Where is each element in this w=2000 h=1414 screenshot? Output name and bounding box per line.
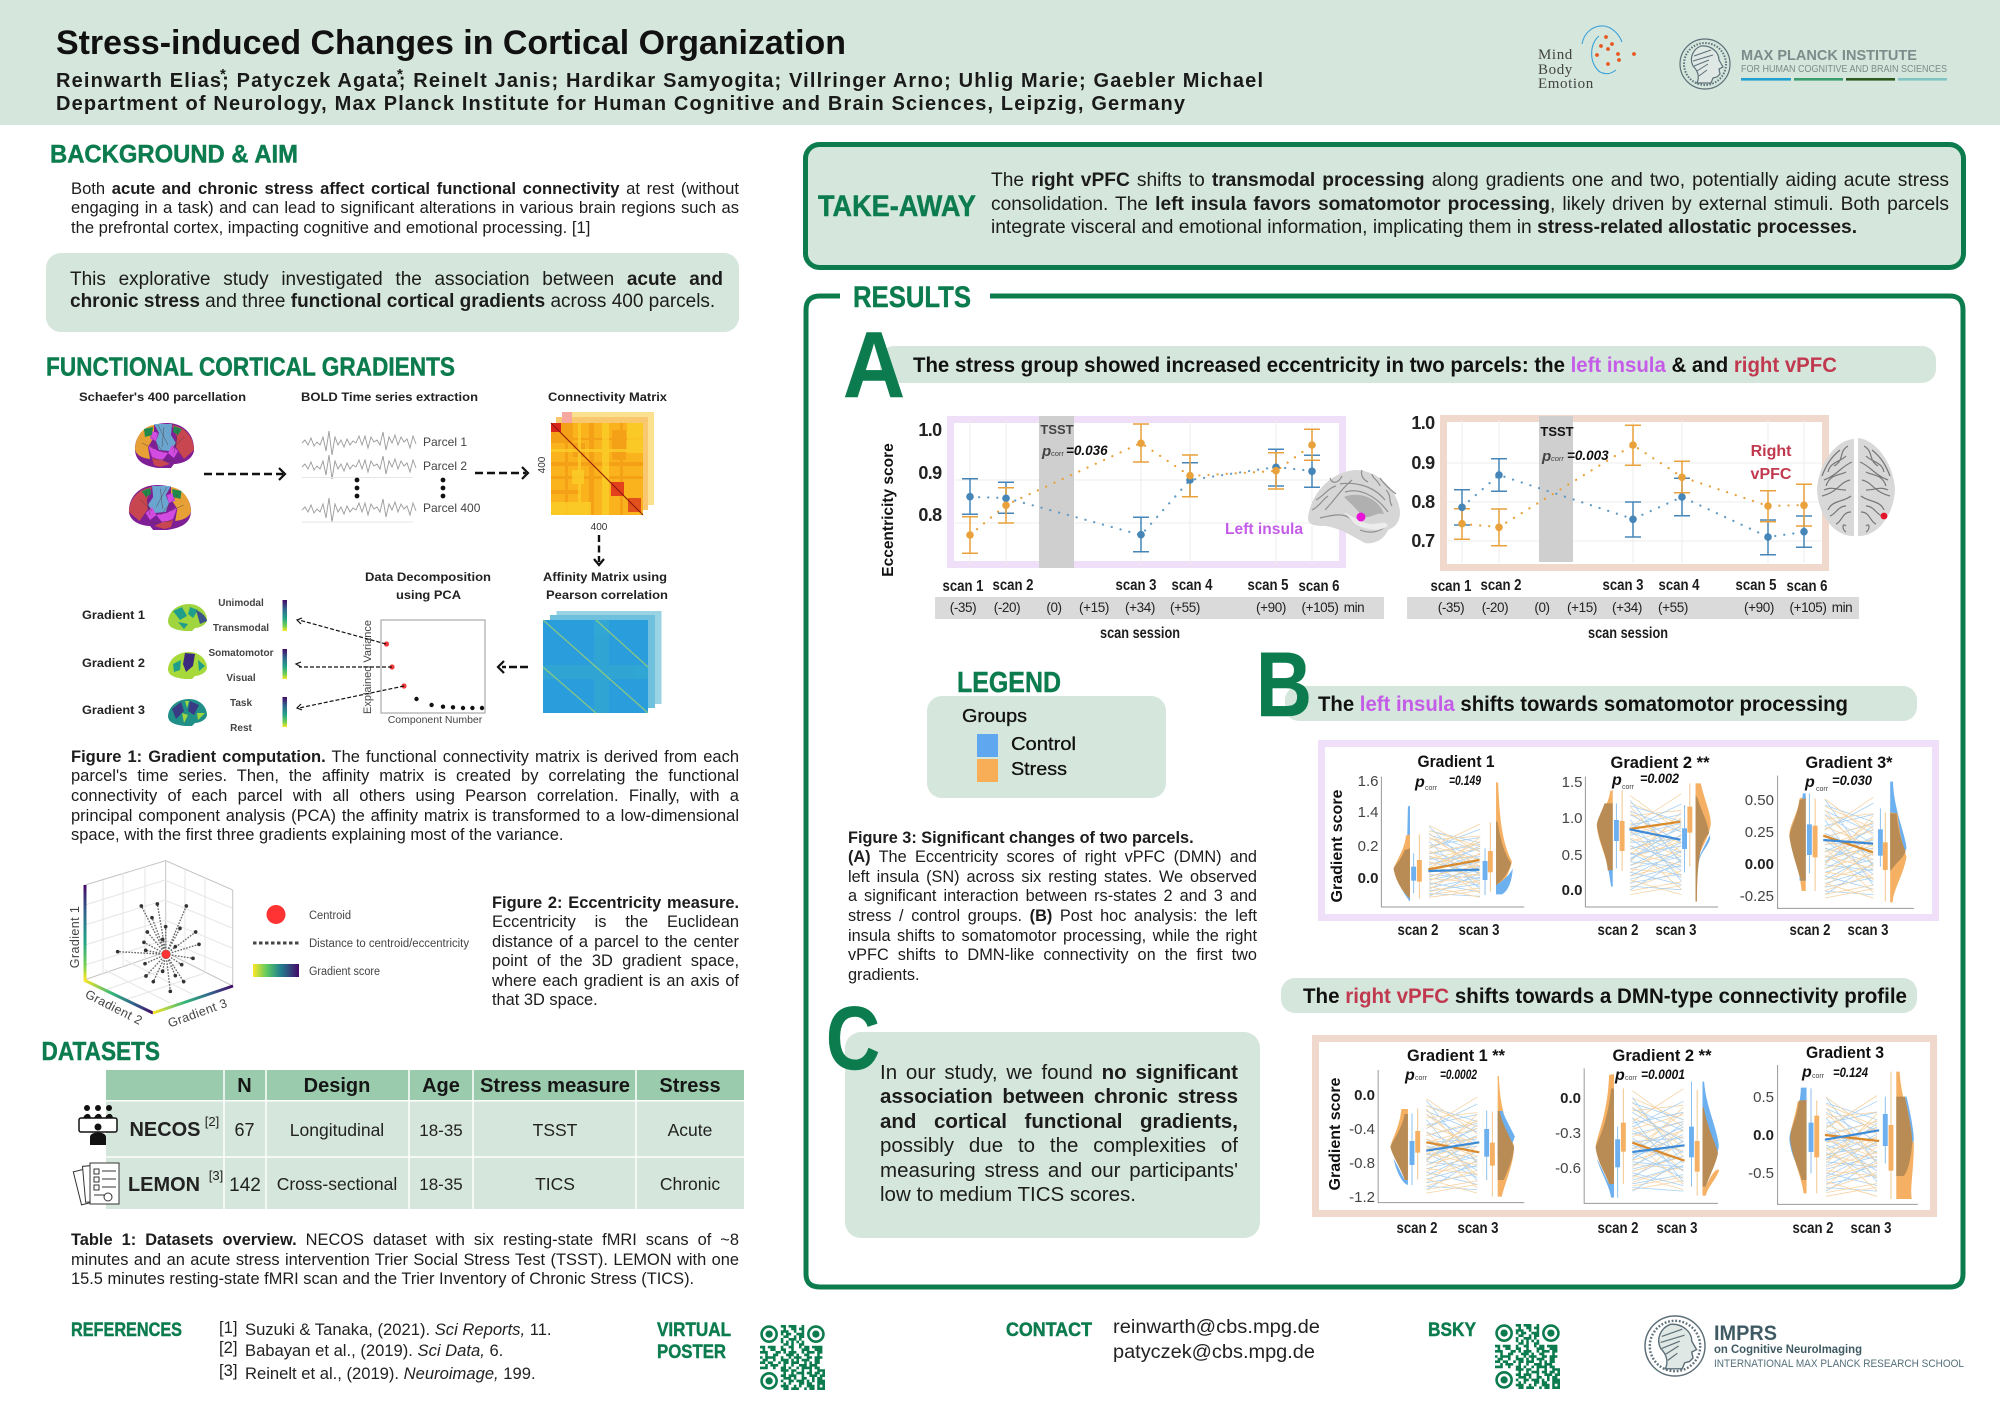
panel: left insula gradient rainclouds — [1322, 744, 1936, 939]
chart A: left insula eccentricity: 1.0 — [918, 420, 942, 440]
figure 2 legend: Centroid — [309, 910, 351, 922]
raincloud: gradient 3: scan 2 — [1792, 1220, 1834, 1237]
panel: take-away — [806, 144, 1964, 268]
label: left insula: Left insula — [1225, 521, 1303, 538]
icon: left insula brain — [1308, 470, 1400, 543]
raincloud: gradient 1: -1.2 — [1349, 1189, 1375, 1206]
text: chronic stress finding: possibly due to the complexities of — [880, 1134, 1238, 1157]
table header: N — [237, 1075, 252, 1097]
time series traces — [302, 431, 481, 522]
connectivity matrix — [537, 412, 654, 533]
table row: NECOS: [2] — [205, 1114, 219, 1129]
raincloud: gradient 1: 1.6 — [1358, 773, 1378, 790]
text: figure 1 caption: space, with the first three gradients explaining most of the variance. — [71, 826, 564, 844]
footer: references: REFERENCES — [71, 1320, 182, 1341]
footer: IMPRS logo: INTERNATIONAL MAX PLANCK RESEARCH SCHOOL — [1714, 1358, 1964, 1370]
gradient labels and maps: Unimodal — [218, 598, 264, 609]
table row: LEMON: Chronic — [660, 1174, 720, 1194]
figure 2: 3D eccentricity plot: Gradient 1 — [68, 906, 82, 968]
text: figure 2 caption — [492, 894, 739, 1009]
gradient labels and maps: Somatomotor — [208, 648, 274, 659]
raincloud: gradient 3: corr — [1816, 786, 1829, 793]
authors: * — [397, 66, 403, 83]
text: figure 3 caption: insula shifts to somatomotor processing, while the right — [848, 927, 1257, 945]
PCA scree plot: Explained Variance — [362, 620, 374, 714]
raincloud: gradient 3: scan 3 — [1850, 1220, 1892, 1237]
text: figure 1 caption: parcel's time series. Then, the affinity matrix is created by correlating the functional — [71, 767, 739, 785]
brain marker: right vPFC — [1881, 513, 1887, 519]
table header: Age — [422, 1075, 460, 1097]
chart A axis: right scan sessions: (0) — [1534, 600, 1550, 615]
raincloud: gradient 2: 1.0 — [1562, 810, 1582, 827]
raincloud: gradient 1: =0.149 — [1449, 773, 1481, 788]
chart A: left insula eccentricity: TSST — [1040, 422, 1074, 437]
raincloud: gradient 2: scan 2 — [1598, 922, 1639, 939]
text: table 1 caption: minutes and an acute stress intervention Trier Social Stress Test (TSST). LEMON with one — [71, 1251, 739, 1269]
text: take-away statement — [991, 170, 1949, 238]
chart A axis: left scan sessions: (-35) — [950, 600, 976, 615]
footer: bluesky QR: BSKY — [1428, 1320, 1476, 1341]
panel: results frame — [806, 296, 1963, 1287]
chart A: right vPFC eccentricity: 1.0 — [1411, 413, 1435, 433]
raincloud: gradient 2: -0.6 — [1555, 1160, 1581, 1177]
text: figure 2 caption: that 3D space. — [492, 991, 598, 1009]
logo: Max Planck Institute: FOR HUMAN COGNITIVE AND BRAIN SCIENCES — [1741, 64, 1947, 75]
text: figure 2 caption: Figure 2: Eccentricity measure. — [492, 894, 739, 912]
raincloud: gradient 1: 0.0 — [1354, 1087, 1375, 1104]
label: right vPFC: vPFC — [1751, 466, 1792, 483]
PCA scree plot: Component Number — [388, 714, 483, 726]
footer: bluesky QR — [1428, 1320, 1560, 1388]
text: figure 2 caption: point of the 3D gradient space, — [492, 952, 739, 970]
text: background paragraph: Both acute and chronic stress affect cortical functional connectivity at rest (without — [71, 178, 739, 198]
raincloud: gradient 3: scan 2 — [1790, 922, 1831, 939]
footer: IMPRS logo: IMPRS — [1714, 1322, 1777, 1345]
gradient labels and maps — [82, 598, 287, 734]
chart A axis: left scan sessions: scan 3 — [1116, 577, 1157, 594]
chart A axis: right scan sessions — [1407, 577, 1859, 642]
text: chronic stress finding: low to medium TICS scores. — [880, 1183, 1136, 1206]
figure 2: 3D eccentricity plot: Gradient 2 — [83, 987, 145, 1028]
footer: contact — [1006, 1316, 1320, 1363]
raincloud: gradient 2: Gradient 2 ** — [1610, 753, 1710, 772]
chart A axis: left scan sessions: (+15) — [1079, 600, 1109, 615]
raincloud: gradient 3: corr — [1812, 1073, 1825, 1080]
raincloud: gradient 2: scan 3 — [1656, 1220, 1698, 1237]
chart A axis: left scan sessions: (-20) — [994, 600, 1020, 615]
raincloud: gradient 2 — [1555, 1046, 1719, 1237]
text: take-away statement: The right vPFC shifts to transmodal processing along gradients one and two, potentially aiding acute stress — [991, 170, 1949, 191]
pipeline step labels: using PCA — [396, 588, 461, 602]
chart A: left insula eccentricity: =0.036 — [1066, 443, 1108, 458]
logo: Max Planck Institute — [1680, 39, 1947, 89]
affinity matrix — [543, 611, 662, 713]
chart A: right vPFC eccentricity: TSST — [1540, 424, 1574, 439]
y-axis label: Gradient score — [1329, 789, 1346, 902]
footer: references: [1] — [219, 1318, 237, 1337]
raincloud: gradient 1: =0.0002 — [1440, 1067, 1477, 1082]
raincloud: gradient 1: Gradient 1 ** — [1407, 1046, 1505, 1065]
raincloud: gradient 1: scan 2 — [1396, 1220, 1438, 1237]
legend panel: Groups — [962, 706, 1027, 726]
logo: Mind Body Emotion: Body — [1538, 62, 1573, 78]
heading: background and aim: BACKGROUND & AIM — [50, 140, 298, 168]
raincloud: gradient 1: p — [1414, 774, 1425, 791]
raincloud: gradient 2: p — [1614, 1067, 1625, 1084]
footer: virtual poster QR: POSTER — [657, 1342, 726, 1363]
pipeline step labels: Data Decomposition — [365, 570, 491, 584]
footer: virtual poster QR: VIRTUAL — [657, 1320, 731, 1341]
panel: aim box — [46, 253, 739, 332]
table row: LEMON: TICS — [535, 1174, 575, 1194]
raincloud: gradient 3: 0.00 — [1745, 856, 1774, 873]
text: background paragraph: the prefrontal cortex, impacting cognitive and emotional processing. [1] — [71, 218, 590, 237]
section letter A: A — [843, 312, 905, 417]
logo: Mind Body Emotion: Mind — [1538, 47, 1573, 63]
chart A axis: right scan sessions: (+55) — [1658, 600, 1688, 615]
banner: right vPFC shifts — [1281, 978, 1917, 1013]
label: right vPFC: Right — [1751, 443, 1792, 460]
text: figure 1 caption: connectivity of each parcel with all others using Pearson correlation. Finally, with a — [71, 787, 739, 805]
text: figure 3 caption: a significant interaction between rs-states 2 and 3 and — [848, 887, 1257, 905]
text: background paragraph — [71, 178, 739, 237]
arrow: parcellation to time series — [204, 468, 285, 480]
pipeline step labels — [79, 390, 668, 602]
gradient labels and maps: Gradient 2 — [82, 656, 145, 670]
text: chronic stress finding: and cortical functional gradients, — [880, 1110, 1238, 1133]
chart A axis: left scan sessions: (+34) — [1125, 600, 1155, 615]
section A banner: The stress group showed increased eccentricity in two parcels: the left insula & and right vPFC — [913, 354, 1837, 377]
PCA scree plot — [362, 620, 485, 726]
raincloud: gradient 1: scan 3 — [1458, 1220, 1499, 1237]
table row: NECOS: TSST — [533, 1120, 578, 1140]
raincloud: gradient 1: p — [1404, 1067, 1415, 1084]
table row: NECOS — [130, 1114, 712, 1141]
section B banner: The left insula shifts towards somatomotor processing — [1318, 693, 1848, 716]
text: figure 3 caption: Figure 3: Significant changes of two parcels. — [848, 828, 1194, 846]
text: figure 1 caption: Figure 1: Gradient computation. The functional connectivity matrix is derived from each — [71, 748, 739, 766]
text: chronic stress finding: association between chronic stress — [880, 1085, 1238, 1108]
affiliation: Department of Neurology, Max Planck Institute for Human Cognitive and Brain Sciences, Leipzig, Germany — [56, 93, 1186, 115]
footer: references: Suzuki & Tanaka, (2021). Sci Reports, 11. — [245, 1320, 552, 1339]
figure 2 legend — [253, 905, 469, 978]
text: figure 2 caption: distance of a parcel to the center — [492, 933, 739, 951]
text: figure 2 caption: Eccentricity is the Euclidean — [492, 913, 739, 931]
chart A axis: left scan sessions: (+90) — [1256, 600, 1286, 615]
footer: IMPRS logo — [1645, 1316, 1964, 1376]
raincloud: gradient 2: corr — [1622, 784, 1635, 791]
time series traces: Parcel 400 — [423, 501, 481, 515]
table row: NECOS: Acute — [668, 1120, 712, 1140]
chart A axis: left scan sessions — [935, 577, 1384, 642]
label: right vPFC — [1751, 443, 1792, 483]
raincloud: gradient 1: 1.4 — [1358, 804, 1378, 821]
brain marker: left insula — [1356, 512, 1366, 522]
raincloud: gradient 2: corr — [1625, 1075, 1638, 1082]
raincloud: gradient 1: scan 3 — [1458, 922, 1500, 939]
footer: IMPRS logo: on Cognitive NeuroImaging — [1714, 1342, 1862, 1356]
raincloud: gradient 2: 0.5 — [1562, 847, 1582, 864]
table: datasets overview — [73, 1070, 744, 1209]
title: Stress-induced Changes in Cortical Organization — [56, 24, 846, 62]
table row: LEMON — [128, 1168, 720, 1196]
raincloud: gradient 3: Gradient 3* — [1806, 753, 1893, 772]
authors: Reinwarth Elias; Patyczek Agata; Reinelt Janis; Hardikar Samyogita; Villringer Arno; Uhlig Marie; Gaebler Michael — [56, 70, 1263, 92]
text: figure 3 caption: vPFC shifts to DMN-like connectivity on the first two — [848, 946, 1257, 964]
raincloud: gradient 1: 0.0 — [1358, 870, 1378, 887]
chart A axis: right scan sessions: scan session — [1588, 625, 1668, 642]
figure 2 legend: Gradient score — [309, 966, 380, 978]
chart A axis: left scan sessions: scan 1 — [942, 578, 984, 595]
table header: Stress — [659, 1075, 721, 1097]
section letter C: C — [826, 989, 880, 1089]
footer: references — [71, 1318, 552, 1383]
connectivity matrix: 400 — [537, 456, 548, 473]
text: figure 1 caption — [71, 748, 739, 844]
figure 2 legend: Distance to centroid/eccentricity — [309, 938, 469, 950]
table row: LEMON: Cross-sectional — [277, 1174, 397, 1194]
table row: LEMON: [3] — [209, 1168, 223, 1183]
text: background paragraph: engaging in a task) and can lead to significant alterations in various brain regions such as — [71, 198, 739, 217]
chart A axis: left scan sessions: (0) — [1046, 600, 1062, 615]
raincloud: gradient 3 — [1748, 1043, 1918, 1237]
text: chronic stress finding — [880, 1061, 1238, 1206]
heading: functional cortical gradients: FUNCTIONAL CORTICAL GRADIENTS — [46, 352, 455, 382]
chart A axis: right scan sessions: scan 4 — [1658, 577, 1700, 594]
text: table 1 caption: Table 1: Datasets overview. NECOS dataset with six resting-state fMRI scans of ~8 — [71, 1231, 739, 1249]
gradient labels and maps: Gradient 1 — [82, 608, 145, 622]
icon: right vPFC brain — [1817, 438, 1895, 536]
footer: contact: CONTACT — [1006, 1320, 1092, 1341]
connectivity matrix: 400 — [591, 522, 608, 533]
heading: legend: LEGEND — [957, 667, 1061, 699]
raincloud: gradient 3 — [1740, 753, 1914, 939]
chart A axis: right scan sessions: (+15) — [1567, 600, 1597, 615]
raincloud: gradient 3: =0.124 — [1833, 1065, 1868, 1080]
raincloud: gradient 2: -0.3 — [1555, 1125, 1581, 1142]
chart A axis: right scan sessions: (-35) — [1438, 600, 1464, 615]
raincloud: gradient 1: -0.4 — [1349, 1121, 1375, 1138]
figure 2: 3D eccentricity plot: Gradient 3 — [166, 996, 229, 1030]
chart A axis: left scan sessions: scan 4 — [1172, 577, 1213, 594]
text: aim statement: This explorative study investigated the association between acute and — [70, 269, 723, 290]
text: take-away statement: integrate visceral and emotional information, implicating them in stress-related allostatic processes. — [991, 217, 1857, 238]
pipeline step labels: Pearson correlation — [546, 588, 668, 602]
raincloud: gradient 2: =0.0001 — [1641, 1067, 1685, 1082]
y-axis label: eccentricity score: Eccentricity score — [880, 443, 897, 577]
chart A: left insula eccentricity — [918, 416, 1400, 568]
chart A: right vPFC eccentricity: 0.9 — [1411, 453, 1435, 473]
chart A axis: left scan sessions: (+105) — [1302, 600, 1338, 615]
pipeline step labels: Schaefer's 400 parcellation — [79, 390, 246, 404]
raincloud: gradient 3: 0.5 — [1753, 1089, 1774, 1106]
text: figure 3 caption: gradients. — [848, 966, 920, 984]
table header: Design — [304, 1075, 370, 1097]
raincloud: gradient 3: p — [1801, 1064, 1812, 1081]
raincloud: gradient 1 — [1349, 1046, 1524, 1237]
chart A axis: left scan sessions: min — [1344, 600, 1364, 615]
raincloud: gradient 1: Gradient 1 — [1418, 752, 1494, 771]
figure 2: 3D eccentricity plot — [68, 861, 233, 1030]
panel: right vPFC gradient rainclouds — [1316, 1038, 1934, 1237]
raincloud: gradient 3: 0.50 — [1745, 792, 1774, 809]
raincloud: gradient 2: p — [1611, 772, 1622, 789]
chart A axis: right scan sessions: (-20) — [1482, 600, 1508, 615]
logo: Mind Body Emotion — [1538, 26, 1636, 92]
chart A: left insula eccentricity: p — [1041, 443, 1051, 460]
chart A: right vPFC eccentricity: 0.7 — [1411, 531, 1435, 551]
table row: LEMON: 18-35 — [419, 1175, 463, 1194]
footer: contact: reinwarth@cbs.mpg.de — [1113, 1316, 1320, 1338]
heading: datasets: DATASETS — [42, 1036, 160, 1066]
text: aim statement — [70, 269, 723, 312]
raincloud: gradient 2: =0.002 — [1640, 771, 1679, 786]
y-axis label: Gradient score — [1327, 1077, 1344, 1190]
chart A: left insula eccentricity: 0.9 — [918, 463, 942, 483]
text: figure 3 caption: left insula (SN) across six resting states. We observed — [848, 868, 1257, 886]
chart A: right vPFC eccentricity: corr — [1551, 454, 1564, 463]
icon: group of people — [79, 1105, 117, 1145]
chart A axis: right scan sessions: (+105) — [1790, 600, 1826, 615]
logo: Mind Body Emotion: Emotion — [1538, 76, 1594, 92]
text: table 1 caption: 15.5 minutes resting-state fMRI scan and the Trier Inventory of Chronic Stress (TICS). — [71, 1270, 694, 1288]
table row: LEMON: 142 — [229, 1175, 261, 1196]
raincloud: gradient 3: p — [1804, 774, 1815, 791]
chart A: left insula eccentricity: corr — [1051, 449, 1064, 458]
authors: * — [220, 66, 226, 83]
heading: results: RESULTS — [853, 281, 971, 314]
time series traces: Parcel 1 — [423, 435, 467, 449]
raincloud: gradient 1: corr — [1425, 785, 1438, 792]
chart A axis: right scan sessions: (+90) — [1744, 600, 1774, 615]
footer: virtual poster QR — [657, 1320, 825, 1389]
chart A axis: left scan sessions: scan 5 — [1248, 577, 1289, 594]
arrow: matrix down to affinity — [594, 535, 604, 565]
raincloud: gradient 2: Gradient 2 ** — [1612, 1046, 1712, 1065]
chart A: right vPFC eccentricity: =0.003 — [1567, 448, 1609, 463]
raincloud: gradient 2: 0.0 — [1562, 882, 1582, 899]
text: figure 3 caption — [848, 828, 1257, 984]
chart A axis: right scan sessions: scan 1 — [1430, 578, 1472, 595]
legend panel: Control — [1011, 734, 1076, 754]
raincloud: gradient 3: 0.25 — [1745, 824, 1774, 841]
chart A axis: right scan sessions: (+34) — [1612, 600, 1642, 615]
table row: NECOS: NECOS — [130, 1119, 200, 1141]
time series traces: Parcel 2 — [423, 459, 467, 473]
gradient labels and maps: Task — [230, 698, 252, 709]
table header — [237, 1075, 721, 1097]
gradient labels and maps: Gradient 3 — [82, 703, 145, 717]
text: figure 3 caption: stress / control groups. (B) Post hoc analysis: the left — [848, 907, 1257, 925]
pipeline step labels: Affinity Matrix using — [543, 570, 667, 584]
chart A: left insula eccentricity: 0.8 — [918, 505, 942, 525]
banner: right vPFC shifts: The right vPFC shifts towards a DMN-type connectivity profile — [1303, 985, 1907, 1008]
raincloud: gradient 1 — [1358, 752, 1524, 939]
text: chronic stress finding: In our study, we found no significant — [880, 1061, 1238, 1084]
raincloud: gradient 3: -0.5 — [1748, 1165, 1774, 1182]
footer: references: Babayan et al., (2019). Sci Data, 6. — [245, 1341, 503, 1360]
pipeline step labels: Connectivity Matrix — [548, 390, 667, 404]
legend panel: Stress — [1011, 759, 1067, 779]
raincloud: gradient 3: scan 3 — [1848, 922, 1889, 939]
raincloud: gradient 2: scan 2 — [1598, 1220, 1639, 1237]
chart A: right vPFC eccentricity — [1411, 413, 1895, 568]
raincloud: gradient 1: corr — [1415, 1075, 1428, 1082]
gradient labels and maps: Visual — [226, 673, 256, 684]
chart A axis: right scan sessions: scan 3 — [1602, 577, 1644, 594]
text: figure 3 caption: (A) The Eccentricity scores of right vPFC (DMN) and — [848, 848, 1257, 866]
raincloud: gradient 2 — [1562, 753, 1718, 939]
text: chronic stress finding: measuring stress and our participants' — [880, 1159, 1238, 1182]
chart A axis: left scan sessions: scan 6 — [1298, 578, 1340, 595]
table header: Stress measure — [480, 1075, 630, 1097]
logo: Max Planck Institute: MAX PLANCK INSTITUTE — [1741, 47, 1917, 64]
gradient labels and maps: Rest — [230, 723, 253, 734]
chart A axis: left scan sessions: scan session — [1100, 625, 1180, 642]
table row: NECOS: Longitudinal — [290, 1120, 384, 1140]
text: table 1 caption — [71, 1231, 739, 1288]
heading: take-away: TAKE-AWAY — [818, 190, 976, 223]
chart A axis: left scan sessions: (+55) — [1170, 600, 1200, 615]
chart A axis: left scan sessions: scan 2 — [992, 577, 1034, 594]
chart A axis: right scan sessions: scan 2 — [1480, 577, 1522, 594]
arrow: affinity to PCA — [498, 661, 528, 673]
chart A axis: right scan sessions: scan 6 — [1786, 578, 1828, 595]
raincloud: gradient 3: =0.030 — [1832, 773, 1872, 788]
legend panel — [927, 696, 1166, 798]
raincloud: gradient 1: 0.2 — [1358, 838, 1378, 855]
footer: references: Reinelt et al., (2019). Neuroimage, 199. — [245, 1364, 536, 1383]
text: figure 2 caption: where each gradient is an axis of — [492, 972, 739, 990]
gradient labels and maps: Transmodal — [213, 623, 269, 634]
icon: parcellated brains — [129, 423, 194, 530]
footer: contact: patyczek@cbs.mpg.de — [1113, 1341, 1315, 1363]
raincloud: gradient 3: Gradient 3 — [1806, 1043, 1884, 1062]
text: figure 1 caption: principal component analysis (PCA) the affinity matrix is transformed to a low-dimensional — [71, 807, 739, 825]
icon: questionnaires — [73, 1163, 119, 1205]
footer: references: [2] — [219, 1338, 237, 1357]
raincloud: gradient 1: -0.8 — [1349, 1155, 1375, 1172]
raincloud: gradient 2: 1.5 — [1562, 774, 1582, 791]
table row: NECOS: 67 — [234, 1120, 255, 1140]
text: take-away statement: consolidation. The left insula favors somatomotor processing, likely driven by external stimuli. Both parcels — [991, 194, 1949, 215]
section B banner — [1256, 634, 1917, 736]
chart A axis: right scan sessions: scan 5 — [1736, 577, 1777, 594]
raincloud: gradient 3: -0.25 — [1740, 888, 1774, 905]
figure 1: gradient computation pipeline — [79, 390, 668, 734]
panel: section C box — [845, 1032, 1260, 1238]
pipeline step labels: BOLD Time series extraction — [301, 390, 478, 404]
section letter B: B — [1256, 634, 1312, 736]
header band — [0, 0, 2000, 125]
section A banner — [843, 312, 1936, 417]
raincloud: gradient 3: 0.0 — [1753, 1127, 1774, 1144]
chart A: right vPFC eccentricity: p — [1541, 448, 1551, 465]
chart A axis: right scan sessions: min — [1832, 600, 1852, 615]
text: aim statement: chronic stress and three functional cortical gradients across 400 parcels. — [70, 291, 715, 312]
raincloud: gradient 2: 0.0 — [1560, 1090, 1581, 1107]
footer: references: [3] — [219, 1361, 237, 1380]
table row: LEMON: LEMON — [128, 1174, 200, 1196]
table row: NECOS: 18-35 — [419, 1121, 463, 1140]
raincloud: gradient 1: scan 2 — [1398, 922, 1439, 939]
arrows: components to gradients — [296, 618, 404, 710]
raincloud: gradient 2: scan 3 — [1656, 922, 1697, 939]
chart A: right vPFC eccentricity: 0.8 — [1411, 492, 1435, 512]
arrow: time series to matrix — [475, 467, 528, 479]
